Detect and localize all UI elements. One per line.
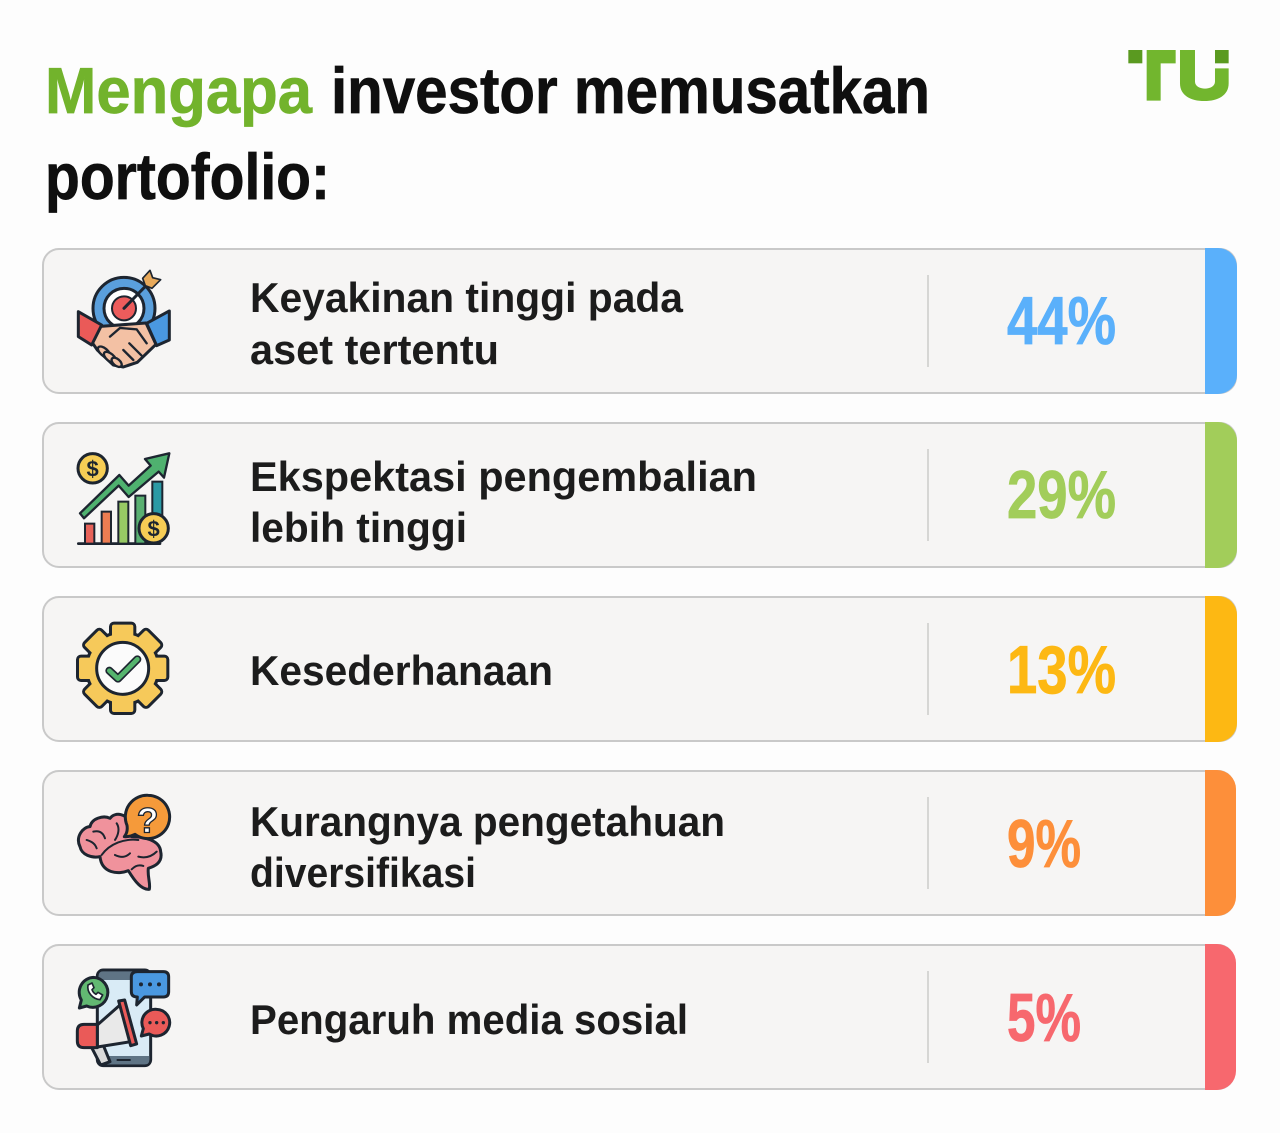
panel: keyakinan tinggi (43, 248, 1237, 394)
panel: pengaruh media sosial (43, 944, 1236, 1090)
icon: brain with question mark (78, 795, 170, 889)
title: portofolio: (45, 140, 330, 213)
label: Ekspektasi pengembalian (250, 453, 757, 500)
icon: phone and megaphone (77, 970, 170, 1066)
panel: kurangnya pengetahuan (43, 770, 1236, 916)
label: Keyakinan tinggi pada (250, 274, 684, 321)
icon: growth chart and coins (78, 453, 169, 544)
icon: target and handshake (78, 270, 169, 369)
icon: gear with check (79, 625, 166, 712)
label: Kesederhanaan (250, 647, 553, 694)
value: 29% (1007, 457, 1116, 533)
value: 44% (1007, 283, 1116, 359)
icon: growth chart and coins: $ (87, 456, 99, 481)
accent bar blue (1205, 248, 1237, 394)
panel: keyakinan tinggi: aset tertentu (250, 326, 499, 373)
label: Kurangnya pengetahuan (250, 798, 725, 845)
value: 9% (1007, 806, 1081, 882)
accent bar yellow (1205, 596, 1237, 742)
value: 5% (1007, 980, 1081, 1056)
panel: kesederhanaan (43, 596, 1237, 742)
panel: kurangnya pengetahuan: diversifikasi (250, 849, 476, 896)
accent bar red (1205, 944, 1236, 1090)
label: Pengaruh media sosial (250, 996, 688, 1043)
accent bar orange (1205, 770, 1236, 916)
panel: ekspektasi pengembalian: lebih tinggi (250, 504, 467, 551)
title (45, 54, 930, 213)
title: investor memusatkan (331, 54, 930, 127)
icon: brain with question mark: ? (137, 802, 158, 841)
icon: growth chart and coins: $ (148, 516, 160, 541)
accent bar green (1205, 422, 1237, 568)
panel: ekspektasi pengembalian (43, 422, 1237, 568)
logo (1128, 50, 1229, 101)
value: 13% (1007, 632, 1116, 708)
title: Mengapa (45, 54, 313, 127)
